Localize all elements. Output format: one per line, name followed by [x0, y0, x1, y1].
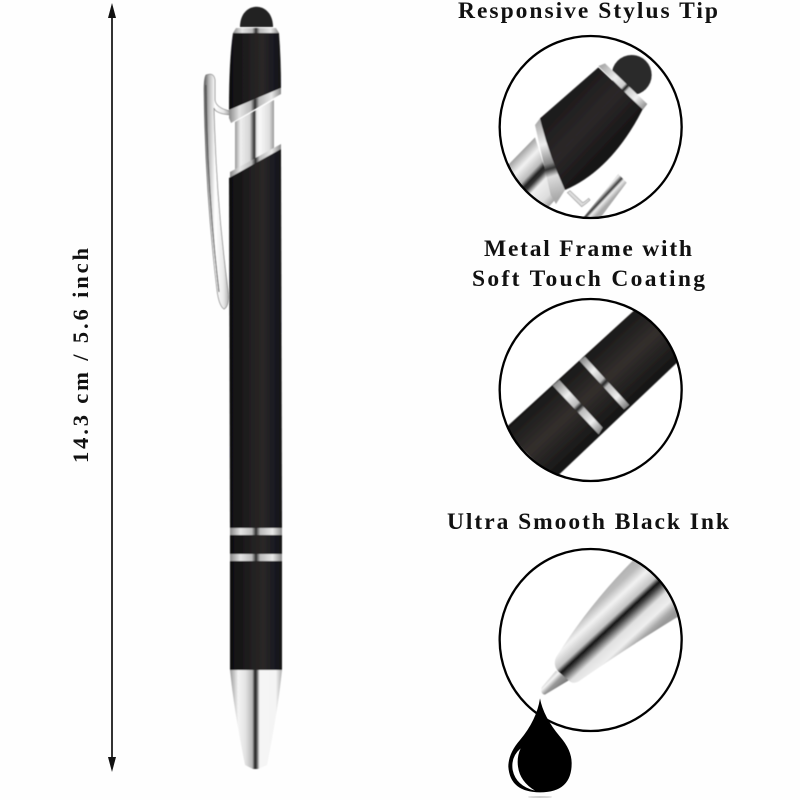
heading: metal frame: [472, 236, 705, 292]
stylus tip: [240, 7, 273, 27]
detail circle: ink tip: [500, 549, 683, 731]
heading: metal frame: Metal Frame with: [484, 236, 692, 262]
barrel grip: [230, 535, 282, 554]
heading: ink: Ultra Smooth Black Ink: [447, 509, 730, 535]
magnified barrel: [508, 310, 676, 474]
barrel lower: [230, 561, 282, 670]
pen clip: [204, 74, 232, 309]
height dimension arrow: [108, 3, 116, 772]
cap ring: [233, 28, 279, 33]
ring one: [230, 528, 282, 535]
main pen illustration: [204, 7, 282, 769]
detail circle: metal frame: [500, 299, 683, 481]
dimension label: 14.3 cm / 5.6 inch: [68, 248, 93, 463]
upper silver band: [229, 88, 281, 123]
metal tip cone: [230, 670, 282, 769]
detail circle: stylus tip: [497, 36, 682, 225]
pen barrel upper: [229, 149, 282, 528]
icon: ink drop: [508, 698, 572, 798]
chrome collar: [235, 100, 274, 172]
magnified pen head: [508, 54, 652, 217]
heading: metal frame: Soft Touch Coating: [472, 266, 705, 292]
ring two: [230, 554, 282, 561]
magnified metal nib: [541, 560, 683, 695]
lower silver band: [230, 144, 281, 178]
black cap: [229, 33, 281, 110]
